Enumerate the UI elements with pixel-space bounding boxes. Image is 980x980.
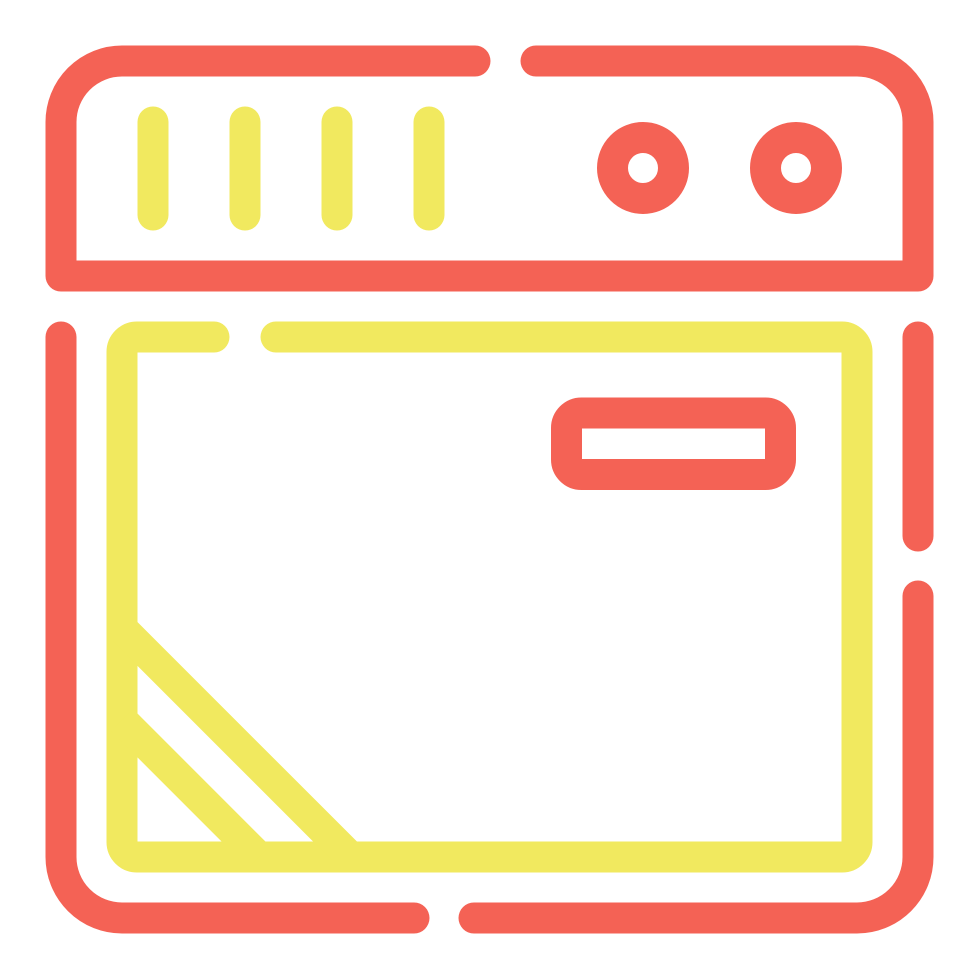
oven body outline bbox=[61, 337, 918, 918]
vent lines bbox=[153, 122, 429, 215]
control knobs bbox=[612, 138, 826, 198]
oven door with glass reflection bbox=[122, 337, 857, 857]
control panel outline bbox=[61, 61, 918, 276]
door handle bbox=[566, 413, 780, 474]
